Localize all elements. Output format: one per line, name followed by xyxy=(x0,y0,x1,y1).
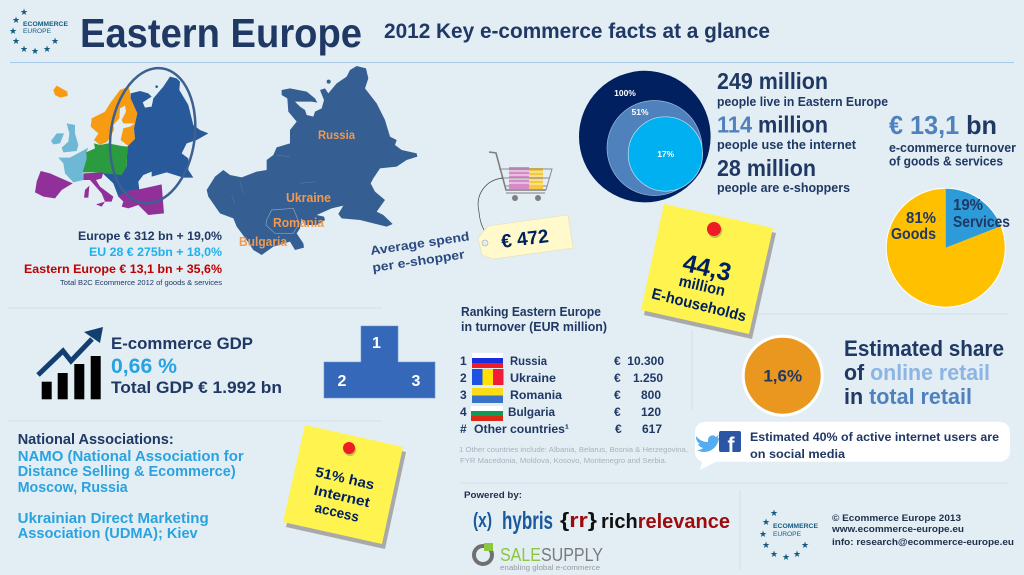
price tag: € 472 xyxy=(500,226,550,253)
row: Ukraine: € xyxy=(614,371,621,385)
text: e-commerce GDP: 0,66 % xyxy=(111,355,177,378)
footnote: other countries xyxy=(459,445,688,465)
text: powered by: Powered by: xyxy=(464,490,522,500)
logo: Ecommerce Europe footer: ★ xyxy=(759,530,767,540)
text: estimated share of online retail: of online retail xyxy=(844,360,990,385)
row: Russia: 1 xyxy=(460,354,467,368)
text block: national associations: National Associations: xyxy=(18,431,174,448)
pie chart: goods vs services: Goods xyxy=(891,226,936,243)
text block: national associations: Association (UDMA); Kiev xyxy=(18,525,198,542)
text block: national associations: Moscow, Russia xyxy=(18,479,128,496)
logo: richrelevance: {rr} xyxy=(560,510,597,532)
footnote: other countries: FYR Macedonia, Moldova, Kosovo, Montenegro and Serbia. xyxy=(460,456,667,465)
icon: ranking podium: 2 xyxy=(338,373,347,390)
text: estimated share of online retail: in total retail xyxy=(844,384,972,409)
text: e-commerce GDP xyxy=(111,335,282,397)
icon: twitter bird xyxy=(696,434,719,452)
title: Eastern Europe xyxy=(80,10,362,56)
footnote: other countries: 1 Other countries include: Albania, Belarus, Bosnia & Herzegovina, xyxy=(459,445,688,454)
table: country ranking xyxy=(460,353,664,436)
logo: Ecommerce Europe footer: ★ xyxy=(782,553,790,563)
row: Bulgaria xyxy=(460,405,661,421)
row: Other countries: # xyxy=(460,422,467,436)
logo: hybris: (x) xyxy=(473,510,492,532)
text block: turnover by region: Total B2C Ecommerce 2012 of goods & services xyxy=(60,280,223,287)
heading: ranking xyxy=(461,305,607,334)
logo: Ecommerce Europe footer: EUROPE xyxy=(773,531,802,538)
sticky note: internet access: Internet xyxy=(312,482,372,510)
row: Romania xyxy=(460,388,661,403)
sticky note: E-households: million xyxy=(677,273,727,300)
pie chart: goods vs services: 81% xyxy=(906,210,936,227)
callout: ellipse around Eastern Europe xyxy=(102,62,204,209)
text: average spend per e-shopper xyxy=(369,229,470,275)
stat: e-commerce turnover xyxy=(889,110,1016,168)
text block: turnover by region: EU 28 € 275bn + 18,0% xyxy=(89,247,222,259)
logo: hybris: hybris xyxy=(502,507,553,535)
nested circles: population: 17% xyxy=(657,149,675,159)
row: Ukraine: 2 xyxy=(460,371,467,385)
row: Ukraine xyxy=(460,369,663,385)
logo: Ecommerce Europe footer: ★ xyxy=(770,509,778,519)
text: estimated share of online retail: Estimated share xyxy=(844,336,1004,361)
icon: ranking podium: 1 xyxy=(372,335,381,352)
logo: Ecommerce Europe header: ★ xyxy=(51,37,59,47)
row: Bulgaria: 4 xyxy=(460,405,467,419)
stats: population: 114 million xyxy=(717,112,828,138)
stats: population xyxy=(717,68,888,195)
label: Romania: Romania xyxy=(273,215,325,230)
text block: national associations: NAMO (National Association for xyxy=(18,448,244,465)
stat: e-commerce turnover: of goods & services xyxy=(889,154,1003,168)
logo: Ecommerce Europe header xyxy=(9,8,69,57)
row: Romania: 800 xyxy=(641,388,661,402)
label: Russia: Russia xyxy=(318,128,355,142)
price tag xyxy=(478,215,573,259)
map: Eastern Europe xyxy=(207,66,417,255)
row: Ukraine: 1.250 xyxy=(633,371,663,385)
text: estimated share of online retail xyxy=(844,336,1004,409)
text block: national associations: Distance Selling & Ecommerce) xyxy=(18,463,236,480)
text: copyright and contact: info: research@ecommerce-europe.eu xyxy=(832,537,1014,547)
stat: e-commerce turnover: € 13,1 bn xyxy=(889,110,997,140)
sticky note: E-households: E-households xyxy=(650,286,748,325)
sticky note: internet access: access xyxy=(313,499,361,525)
sticky note: internet access xyxy=(283,425,406,549)
stats: population: 249 million xyxy=(717,68,828,94)
text: social media share: Estimated 40% of active internet users are xyxy=(750,430,999,444)
text: e-commerce GDP: Total GDP € 1.992 bn xyxy=(111,379,282,397)
logo: Ecommerce Europe header: ★ xyxy=(20,45,28,55)
sticky note: E-households: 44,3 xyxy=(680,249,734,287)
row: Other countries xyxy=(460,422,662,436)
row: Russia: Russia xyxy=(510,354,547,368)
circle: 1,6% online share: 1,6% xyxy=(763,366,802,386)
sticky note: internet access: 51% has xyxy=(314,463,376,493)
heading: ranking: Ranking Eastern Europe xyxy=(461,305,601,319)
text block: turnover by region: Europe € 312 bn + 19,0% xyxy=(78,231,222,243)
logo: Ecommerce Europe footer: ★ xyxy=(762,518,770,528)
icon: growth chart xyxy=(38,327,103,399)
logo: salesupply xyxy=(474,543,603,572)
logo: Ecommerce Europe header: ECOMMERCE xyxy=(23,21,69,28)
heading: ranking: in turnover (EUR million) xyxy=(461,320,607,334)
text: copyright and contact: © Ecommerce Europe 2013 xyxy=(832,513,961,523)
text: copyright and contact xyxy=(831,513,1014,547)
icon: ranking podium xyxy=(324,326,435,398)
logo: hybris xyxy=(473,507,553,535)
stats: population: people are e-shoppers xyxy=(717,181,850,195)
logo: salesupply: enabling global e-commerce xyxy=(500,563,600,572)
pie chart: goods vs services xyxy=(886,188,1010,308)
circle: 1,6% online share xyxy=(742,335,824,417)
row: Other countries: Other countries¹ xyxy=(474,422,569,436)
label: Bulgaria: Bulgaria xyxy=(239,234,288,249)
row: Russia: € xyxy=(614,354,621,368)
logo: Ecommerce Europe header: ★ xyxy=(43,45,51,55)
pie chart: goods vs services: Services xyxy=(953,214,1010,231)
text: e-commerce GDP: E-commerce GDP xyxy=(111,335,253,353)
logo: Ecommerce Europe header: EUROPE xyxy=(23,28,52,35)
logo: Ecommerce Europe footer xyxy=(759,509,819,563)
icon: facebook xyxy=(719,431,741,457)
row: Bulgaria: 120 xyxy=(641,405,661,419)
logo: Ecommerce Europe header: ★ xyxy=(9,27,17,37)
text block: national associations: Ukrainian Direct Marketing xyxy=(18,510,209,527)
logo: Ecommerce Europe footer: ★ xyxy=(801,541,809,551)
icon: ranking podium: 3 xyxy=(412,373,421,390)
text: social media share: on social media xyxy=(750,447,845,461)
text: social media share xyxy=(750,430,999,461)
logo: Ecommerce Europe header: ★ xyxy=(12,16,20,26)
stats: population: people live in Eastern Europe xyxy=(717,95,888,109)
logo: Ecommerce Europe header: ★ xyxy=(31,47,39,57)
pie chart: goods vs services: 19% xyxy=(953,197,983,214)
row: Other countries: 617 xyxy=(642,422,662,436)
callout: social media bubble xyxy=(695,422,1010,470)
stats: population: people use the internet xyxy=(717,138,857,152)
logo: Ecommerce Europe footer: ★ xyxy=(770,550,778,560)
row: Russia xyxy=(460,353,664,368)
row: Russia: 10.300 xyxy=(627,354,664,368)
row: Bulgaria: € xyxy=(614,405,621,419)
row: Bulgaria: Bulgaria xyxy=(508,405,555,419)
logo: Ecommerce Europe footer: ECOMMERCE xyxy=(773,523,819,530)
stats: population: 28 million xyxy=(717,155,816,181)
text: average spend per e-shopper: per e-shopper xyxy=(371,247,466,275)
nested circles: population: 100% xyxy=(614,88,636,98)
row: Other countries: € xyxy=(615,422,622,436)
text block: turnover by region: Eastern Europe € 13,1 bn + 35,6% xyxy=(24,264,222,276)
logo: Ecommerce Europe footer: ★ xyxy=(793,550,801,560)
row: Romania: Romania xyxy=(510,388,562,402)
text block: turnover by region xyxy=(24,231,223,287)
nested circles: population: 51% xyxy=(631,107,649,117)
stat: e-commerce turnover: e-commerce turnover xyxy=(889,141,1016,155)
subtitle: 2012 Key e-commerce facts at a glance xyxy=(384,20,770,43)
logo: Ecommerce Europe header: ★ xyxy=(20,8,28,18)
logo: salesupply: SALESUPPLY xyxy=(500,545,603,565)
row: Ukraine: Ukraine xyxy=(510,371,556,385)
logo: Ecommerce Europe footer: ★ xyxy=(762,541,770,551)
sticky note: E-households xyxy=(641,204,776,339)
icon: shopping cart xyxy=(478,152,552,230)
text: copyright and contact: www.ecommerce-europe.eu xyxy=(831,524,964,534)
text: average spend per e-shopper: Average spend xyxy=(369,229,470,258)
icon: facebook: f xyxy=(728,434,736,457)
row: Romania: 3 xyxy=(460,388,467,402)
map: Europe overview xyxy=(35,62,208,215)
logo: richrelevance: richrelevance xyxy=(601,511,730,533)
row: Romania: € xyxy=(614,388,621,402)
text block: national associations xyxy=(18,431,244,542)
label: Ukraine: Ukraine xyxy=(286,190,331,205)
logo: Ecommerce Europe header: ★ xyxy=(12,37,20,47)
nested circles: population xyxy=(579,71,711,202)
